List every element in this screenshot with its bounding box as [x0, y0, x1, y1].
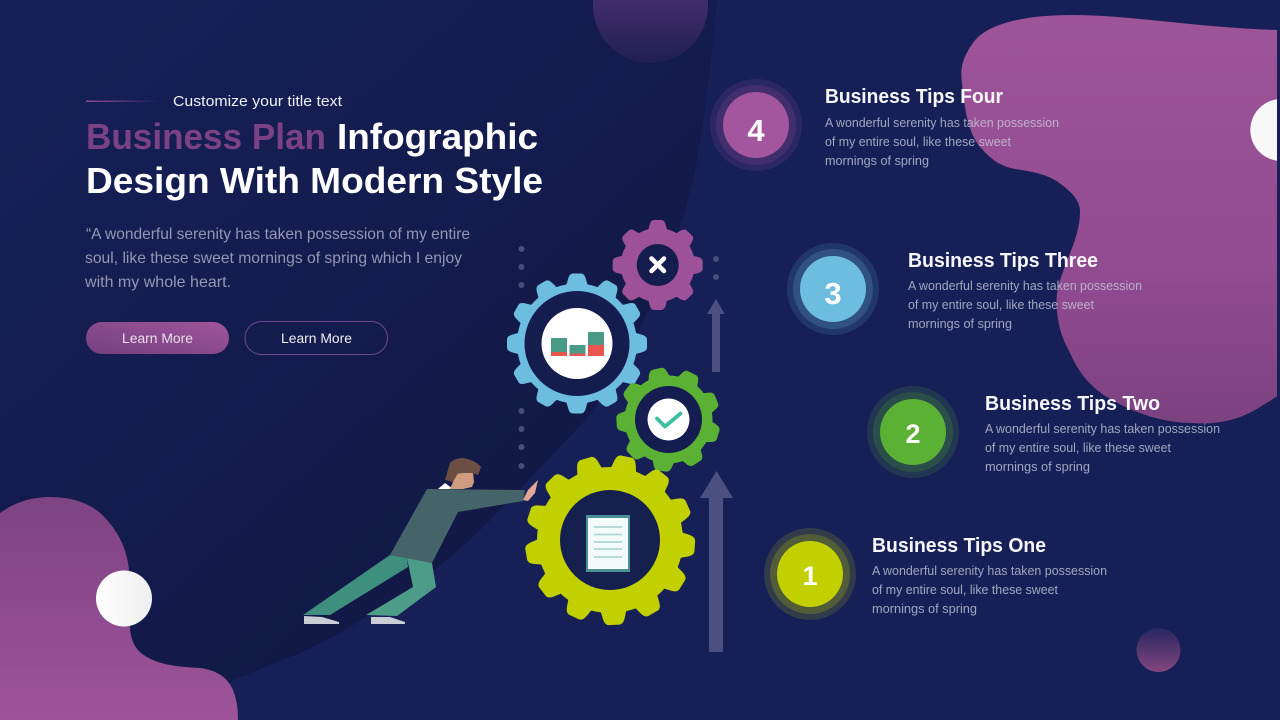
- tip 2: [867, 386, 1220, 478]
- badge 2: [867, 386, 959, 478]
- tip 2 text: A wonderful serenity has taken possession: [985, 422, 1220, 436]
- tip 2 text: Business Tips Two: [985, 393, 1160, 415]
- decorative circle: bottom right: [1136, 628, 1180, 672]
- icon: white circle on bottom left blob: [96, 570, 152, 626]
- main heading: Business Plan: [86, 116, 326, 157]
- decorative circle: top center: [593, 0, 708, 63]
- face: [450, 472, 474, 489]
- tip 4 text: of my entire soul, like these sweet: [825, 135, 1012, 149]
- badge 3: 3: [824, 276, 842, 311]
- intro paragraph: “A wonderful serenity has taken possession of my entire: [86, 226, 470, 243]
- tip 3: [787, 243, 1142, 335]
- dark curved background shape: [0, 0, 717, 720]
- tip 3 text: Business Tips Three: [908, 250, 1098, 272]
- gear: purple with cross: [613, 220, 703, 310]
- back leg: [303, 555, 408, 615]
- tip 4 text: Business Tips Four: [825, 86, 1003, 108]
- tip 3 text: A wonderful serenity has taken possession: [908, 279, 1142, 293]
- tip 4 text: [825, 86, 1059, 168]
- tip 1 text: Business Tips One: [872, 535, 1046, 557]
- button: filled: [86, 322, 229, 354]
- badge 3: [787, 243, 879, 335]
- tip 2 text: of my entire soul, like these sweet: [985, 441, 1172, 455]
- tip 4 text: A wonderful serenity has taken possession: [825, 116, 1059, 130]
- button: filled: Learn More: [122, 331, 193, 346]
- tip 3 text: of my entire soul, like these sweet: [908, 298, 1095, 312]
- main heading: [86, 116, 543, 201]
- badge 1: 1: [802, 561, 818, 591]
- main heading: Infographic: [337, 116, 538, 157]
- badge 4: [710, 79, 802, 171]
- tip 1 text: of my entire soul, like these sweet: [872, 583, 1059, 597]
- icon: cross: [652, 258, 664, 271]
- tip 3 text: [908, 250, 1142, 331]
- eyebrow line and title text: Customize your title text: [173, 93, 343, 110]
- tip 2 text: [985, 393, 1220, 474]
- arrow: large upward: [700, 471, 733, 652]
- intro paragraph: with my whole heart.: [84, 274, 231, 291]
- badge 4: 4: [747, 113, 765, 148]
- button: outlined: [245, 322, 388, 354]
- tip 2 text: mornings of spring: [985, 460, 1090, 474]
- icon: white circle on top right blob: [1250, 99, 1277, 161]
- dots: left column: [518, 246, 524, 469]
- gear: yellow with document: [524, 454, 696, 626]
- hand: [523, 480, 538, 501]
- icon: check mark: [657, 414, 680, 426]
- badge 1: [764, 528, 856, 620]
- illustration: man pushing gear: [303, 458, 538, 624]
- icon: document: [586, 515, 630, 572]
- collar: [438, 483, 453, 489]
- intro paragraph: soul, like these sweet mornings of spring which I enjoy: [85, 250, 462, 267]
- tip 4 text: mornings of spring: [825, 154, 929, 168]
- intro paragraph: [84, 226, 470, 291]
- tip 1 text: [872, 535, 1107, 616]
- gear: green with check: [616, 366, 721, 472]
- icon: bar chart: [551, 332, 604, 356]
- tip 3 text: mornings of spring: [908, 317, 1012, 331]
- blob: top right purple: [961, 15, 1277, 423]
- button: outlined: Learn More: [281, 331, 352, 346]
- blob: bottom left purple: [0, 497, 238, 720]
- torso and arm: [390, 489, 525, 563]
- shoes: [304, 616, 405, 624]
- tip 1 text: A wonderful serenity has taken possession: [872, 564, 1107, 578]
- dots: right column: [713, 256, 719, 280]
- main heading: Design With Modern Style: [86, 160, 543, 201]
- gear: blue with bar chart: [507, 274, 647, 414]
- front leg: [366, 558, 436, 616]
- tip 1 text: mornings of spring: [872, 602, 977, 616]
- tip 4: [710, 79, 1059, 171]
- badge 2: 2: [905, 419, 921, 449]
- tip 1: [764, 528, 1107, 620]
- arrow: small upward: [707, 299, 724, 372]
- hair: [445, 458, 481, 482]
